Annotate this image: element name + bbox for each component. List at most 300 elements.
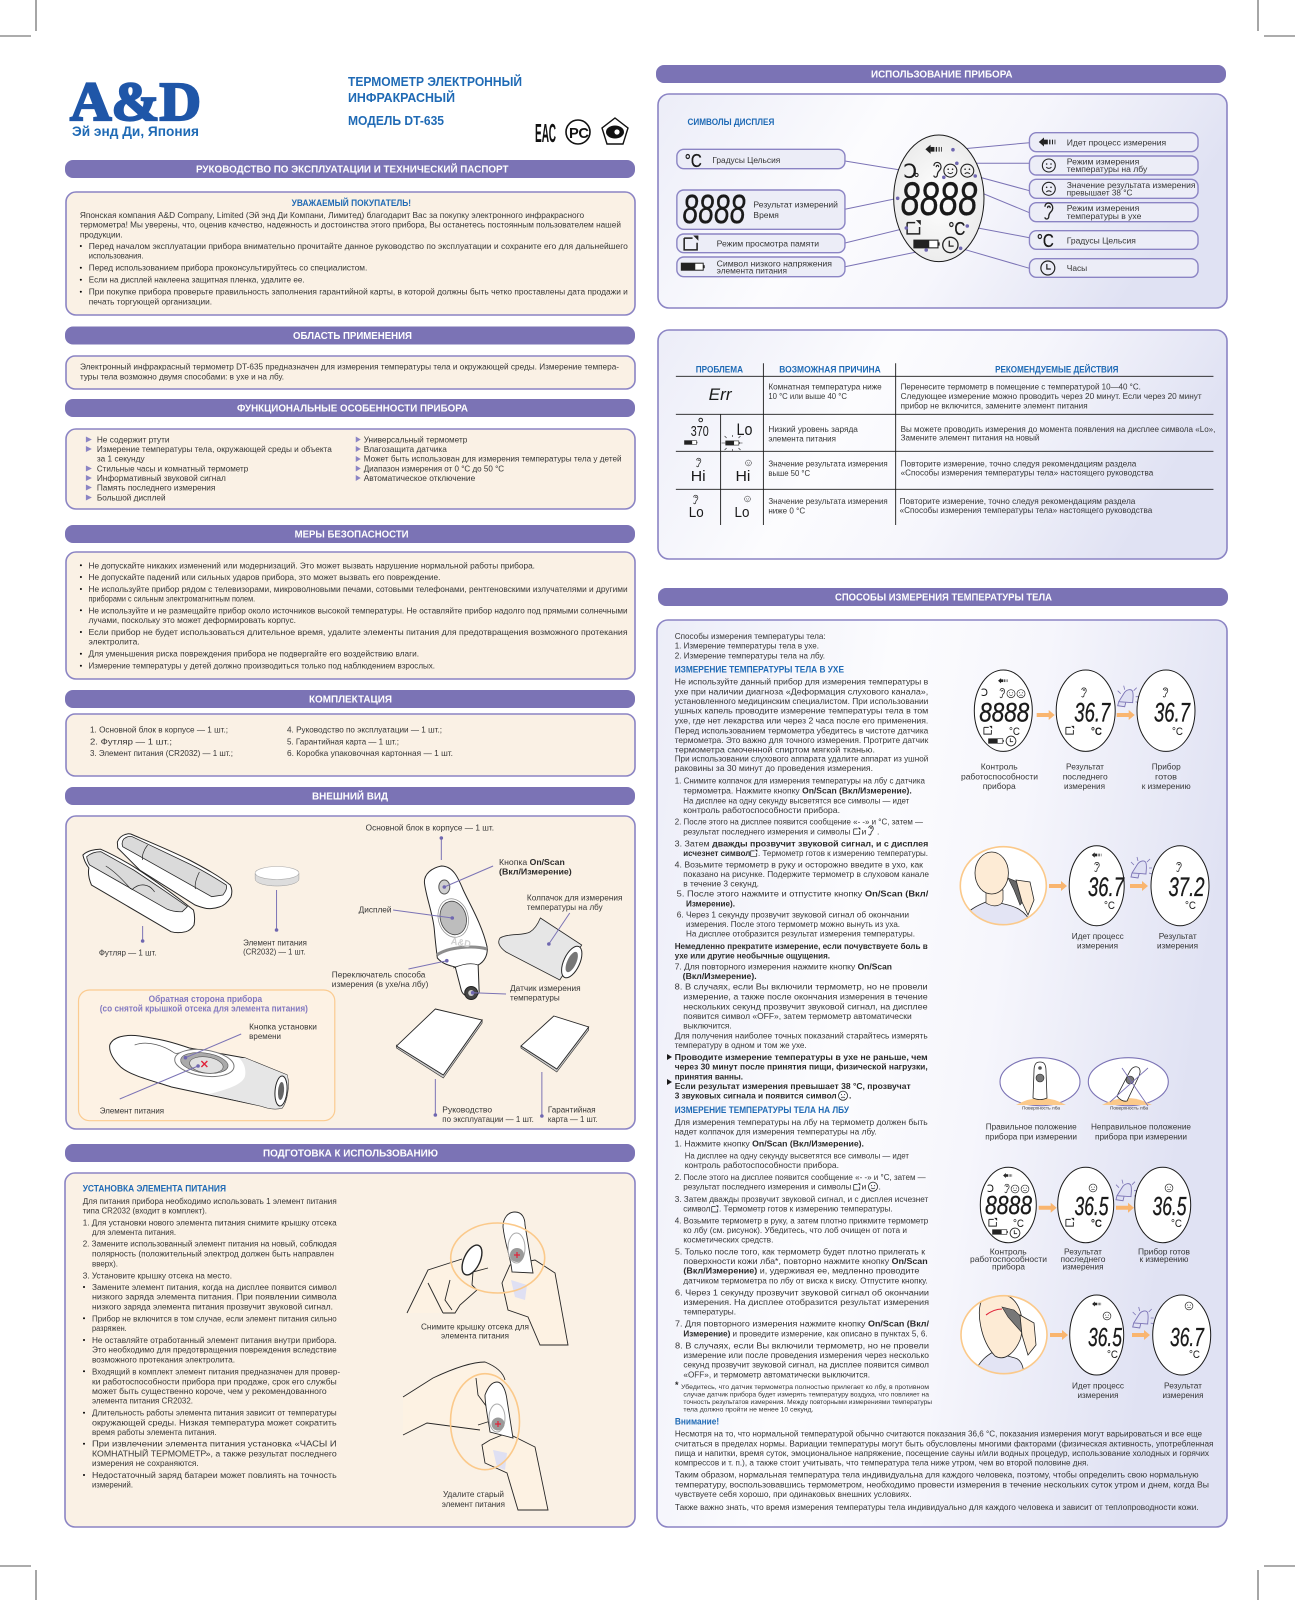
- text block: attention: чувствуете себя хорошо, при одинаковых внешних условиях.: [675, 1489, 912, 1499]
- display: ready: 36.5: [1152, 1191, 1187, 1221]
- text block: ear measurement: На дисплее на одну секунду высветятся все символы — идет: [683, 795, 909, 805]
- bar: features: ФУНКЦИОНАЛЬНЫЕ ОСОБЕННОСТИ ПРИБОРА: [237, 403, 468, 415]
- arrow: [1049, 881, 1067, 891]
- display: self-check: [974, 670, 1032, 751]
- legend: high temperature: [1029, 179, 1198, 198]
- row: low battery: 370: [691, 423, 709, 440]
- display: ready: °C: [1171, 1218, 1182, 1230]
- leader: warranty: [540, 1072, 544, 1118]
- text block: battery installation: для элемента питания.: [92, 1227, 176, 1237]
- bar: usage: ИСПОЛЬЗОВАНИЕ ПРИБОРА: [871, 68, 1013, 80]
- display: self-check: 8888: [985, 1190, 1032, 1220]
- legend: high temperature: превышает 38 °C: [1067, 188, 1132, 198]
- panel: preparation: Снимите крышку отсека для: [421, 1322, 529, 1332]
- panel: contents: 1. Основной блок в корпусе — 1 шт.;: [90, 725, 228, 735]
- text block: ear measurement: 2. Измерение температуры тела на лбу.: [675, 650, 825, 660]
- captions: к измерению: [1142, 781, 1191, 791]
- display: self-check: °C: [1009, 726, 1020, 738]
- display: result: [1153, 1295, 1211, 1375]
- text block: forehead measurement: На дисплее на одну секунду высветятся все символы — идет: [685, 1150, 909, 1160]
- text block: forehead measurement: надет колпачок для измерения температуры на лбу.: [675, 1127, 877, 1137]
- text block: ear measurement: 1. Снимите колпачок для измерения температуры на лбу с датчика: [675, 776, 925, 786]
- captions: прибора при измерении: [985, 1131, 1077, 1141]
- panel: appearance: Датчик измерения: [510, 983, 581, 993]
- panel: features: [66, 429, 635, 509]
- panel: dear customer: [66, 192, 635, 315]
- bar: scope: [65, 326, 635, 344]
- text block: forehead measurement: 5. Только после того, как термометр будет плотно прилегать к: [675, 1246, 925, 1256]
- diagram: forehead measurement: [961, 1295, 1211, 1400]
- panel: methods: [657, 620, 1227, 1527]
- arrow: [1117, 710, 1135, 720]
- panel: back side inset: Элемент питания: [100, 1106, 164, 1116]
- leader: button: [443, 866, 493, 889]
- panel: appearance: температуры: [510, 993, 560, 1003]
- panel: features: Автоматическое отключение: [364, 473, 475, 483]
- text block: battery installation: Не оставляйте отработанный элемент питания внутри прибора.: [92, 1335, 337, 1345]
- text block: ear measurement: Перед использованием термометра убедитесь в чистоте датчика: [675, 725, 929, 735]
- text block: ear measurement: 5. После этого нажмите и отпустите кнопку On/Scan (Вкл/: [677, 888, 929, 898]
- bar: scope: ОБЛАСТЬ ПРИМЕНЕНИЯ: [293, 330, 412, 342]
- bar: preparation: [65, 1144, 635, 1162]
- text block: battery installation: При извлечении элемента питания установка «ЧАСЫ И: [92, 1439, 337, 1449]
- captions: прибора при измерении: [1095, 1131, 1187, 1141]
- text block: battery installation: может быть существенно короче, чем у рекомендованного: [92, 1386, 327, 1396]
- bar: contents: [65, 690, 635, 708]
- panel: appearance: [66, 816, 635, 1129]
- captions: [961, 762, 1191, 791]
- captions: измерения: [1078, 1390, 1119, 1400]
- text block: ear measurement: через 30 минут после принятия пищи, физической нагрузки,: [675, 1062, 928, 1072]
- text block: battery installation: измерения не сохраняются.: [92, 1458, 199, 1468]
- panel: display symbols: [658, 94, 1227, 308]
- bar: features: [65, 399, 635, 417]
- row: Lo: ниже 0 °C: [768, 505, 805, 515]
- text block: ear measurement: и: [862, 826, 866, 836]
- row: low battery: Низкий уровень заряда: [768, 424, 858, 434]
- captions: Неправильное положение: [1091, 1122, 1191, 1132]
- display: ready: 36.7: [1154, 698, 1191, 728]
- text block: ear measurement: 6. Через 1 секунду прозвучит звуковой сигнал об окончании: [677, 910, 909, 920]
- text block: ear measurement: ухе или другие необычные ощущения.: [675, 951, 830, 961]
- text block: battery installation: ки работоспособности прибора при продаже, срок его службы: [92, 1376, 337, 1386]
- display: ready: [1137, 670, 1195, 751]
- bar: manual heading: [65, 160, 635, 178]
- text block: forehead measurement: косметических средств.: [683, 1235, 773, 1245]
- icon: manual: [397, 1009, 482, 1078]
- row: low battery: [684, 418, 1215, 451]
- bar: manual heading: РУКОВОДСТВО ПО ЭКСПЛУАТАЦИИ И ТЕХНИЧЕСКИЙ ПАСПОРТ: [196, 163, 509, 176]
- text block: battery installation: разряжен.: [92, 1323, 127, 1333]
- text block: battery installation: 3. Установите крышку отсека на место.: [83, 1270, 232, 1280]
- legend: clock: Часы: [1067, 263, 1087, 273]
- bar: methods: [658, 588, 1228, 606]
- arrow: [1116, 1203, 1134, 1213]
- text block: ear measurement: термометра. Это важно для точного измерения. Протрите датчик: [675, 735, 929, 745]
- logo: A&D: Эй энд Ди, Япония: [72, 123, 199, 139]
- text block: forehead measurement: измерения. На дисплее отобразится результат измерения: [683, 1297, 929, 1307]
- text block: battery installation: 1. Для установки нового элемента питания снимите крышку отсека: [83, 1217, 337, 1227]
- footnote: случае датчик прибора будет измерять температуру воздуха, что повлияет на: [683, 1390, 929, 1398]
- captions: работоспособности: [970, 1254, 1047, 1264]
- text block: ear measurement: ухе при наличии диагноза «Деформация слухового канала»,: [675, 686, 928, 696]
- panel: preparation: Удалите старый: [443, 1489, 504, 1499]
- panel: contents: [66, 714, 635, 776]
- panel: safety: Не используйте прибор рядом с телевизорами, микроволновыми печами, сотовыми телефонами, рентгеновскими излучателями и другими: [88, 584, 628, 594]
- panel: scope: Электронный инфракрасный термометр DT-635 предназначен для измерения температуры тела и окружающей среды. Измерение темпера-: [80, 361, 619, 371]
- text block: battery installation: измерений.: [92, 1480, 133, 1490]
- title: ТЕРМОМЕТР ЭЛЕКТРОННЫЙ: [348, 74, 522, 89]
- row: Hi: Повторите измерение, точно следуя рекомендациям раздела: [901, 458, 1137, 468]
- bar: preparation: ПОДГОТОВКА К ИСПОЛЬЗОВАНИЮ: [263, 1148, 438, 1160]
- icon: device back: [110, 1035, 288, 1109]
- text block: forehead measurement: «OFF», и термометр автоматически выключится.: [683, 1369, 870, 1379]
- leader: battery: [275, 890, 278, 932]
- captions: последнего: [1060, 1254, 1106, 1264]
- panel: appearance: Футляр — 1 шт.: [99, 947, 157, 957]
- panel: troubleshooting: РЕКОМЕНДУЕМЫЕ ДЕЙСТВИЯ: [995, 363, 1118, 374]
- display: self-check: Ↄ: [987, 1184, 994, 1195]
- captions: измерения: [1062, 1262, 1104, 1272]
- text block: battery installation: Для питания прибора необходимо использовать 1 элемент питания: [83, 1196, 337, 1206]
- panel: safety: приборами с сильным электромагнитным полем.: [88, 594, 255, 604]
- certification marks: ЕАС: [535, 118, 556, 148]
- panel: features: Влагозащита датчика: [364, 444, 447, 454]
- correct position: [1000, 1058, 1080, 1110]
- display: result: °C: [1189, 1349, 1200, 1361]
- panel: features: Память последнего измерения: [97, 483, 216, 493]
- leader: time button: [184, 1034, 241, 1059]
- text block: ear measurement: Не используйте данный прибор для измерения температуры в: [675, 676, 929, 686]
- text block: ear measurement: ушных капель проводите измерение температуры тела в том: [675, 706, 928, 716]
- display: measuring: [1069, 846, 1125, 926]
- text block: ear measurement: раковины за 30 минут до проведения измерения.: [675, 763, 873, 773]
- bar: safety: МЕРЫ БЕЗОПАСНОСТИ: [295, 529, 409, 541]
- text block: battery installation: УСТАНОВКА ЭЛЕМЕНТА ПИТАНИЯ: [83, 1183, 226, 1193]
- panel: safety: Не допускайте никаких изменений или модернизаций. Это может вызвать нарушение нормальной работы прибора.: [88, 560, 535, 570]
- text block: ear measurement: исчезнет символ: [683, 848, 750, 858]
- row: Err: 10 °C или выше 40 °C: [768, 391, 847, 401]
- footnote: Убедитесь, что датчик термометра полностью прилегает ко лбу, в противном: [681, 1383, 929, 1391]
- captions: Идет процесс: [1072, 931, 1124, 941]
- captions: измерения: [1077, 941, 1118, 951]
- panel: contents: 6. Коробка упаковочная картонная — 1 шт.: [287, 748, 453, 758]
- row: Err: прибор не включится, замените элемент питания: [901, 400, 1088, 410]
- text block: ear measurement: измерение, а также после окончания измерения в течение: [683, 992, 928, 1002]
- text block: forehead measurement: поверхности кожи лба*, повторно нажмите кнопку On/Scan: [683, 1256, 928, 1266]
- text block: attention: Таким образом, нормальная температура тела индивидуальна для каждого человека, поэтому, чтобы определить свою нормальную: [675, 1470, 1199, 1480]
- text block: forehead measurement: .: [878, 1182, 881, 1192]
- text block: forehead measurement: секунд прозвучит звуковой сигнал, на дисплее появится символ: [683, 1360, 929, 1370]
- icon: warranty card: [521, 1016, 589, 1072]
- legend: forehead mode: [1029, 156, 1198, 175]
- text block: ear measurement: .: [877, 826, 879, 836]
- legend: result: [677, 186, 845, 232]
- display: measuring: 36.7: [1088, 872, 1125, 902]
- captions: Прибор готов: [1138, 1246, 1190, 1256]
- text block: forehead measurement: ИЗМЕРЕНИЕ ТЕМПЕРАТУРЫ ТЕЛА НА ЛБУ: [675, 1105, 849, 1115]
- text block: ear measurement: 3 звуковых сигнала и появится символ: [675, 1091, 837, 1101]
- display: result: [1151, 846, 1209, 926]
- text block: attention: компрессов и т. п.), а также стоит учитывать, что температура тела ниже утром, чем во второй половине дня.: [675, 1458, 1089, 1468]
- legend: low battery: элемента питания: [717, 266, 787, 276]
- diagram: correct and incorrect positioning: [985, 1058, 1191, 1141]
- illustration: removing cover: [407, 1212, 568, 1345]
- row: low battery: Замените элемент питания на новый: [901, 433, 1040, 443]
- text block: forehead measurement: 1. Нажмите кнопку On/Scan (Вкл/Измерение).: [675, 1138, 864, 1148]
- captions: Результат: [1159, 931, 1197, 941]
- incorrect position: Поверхность лба: [1110, 1106, 1148, 1110]
- row: Lo: Lo: [735, 504, 749, 521]
- text block: ear measurement: измерения. После этого термометр можно вынуть из уха.: [686, 919, 900, 929]
- legend: low battery: Символ низкого напряжения: [717, 258, 832, 268]
- text block: ear measurement: показано на рисунке. Подержите термометр в слуховом канале: [683, 869, 929, 879]
- row: Hi: Hi: [736, 468, 750, 485]
- captions: Контроль: [990, 1246, 1027, 1256]
- text block: ear measurement: Для получения наиболее точных показаний старайтесь измерять: [675, 1030, 928, 1040]
- text block: forehead measurement: символ: [683, 1204, 710, 1214]
- panel: safety: лучами, поскольку это может деформировать корпус.: [88, 615, 296, 625]
- panel: dear customer: Перед использованием прибора проконсультируйтесь со специалистом.: [89, 263, 367, 273]
- footnote: тела должно пройти не менее 10 секунд.: [683, 1405, 814, 1413]
- text block: ear measurement: (Вкл/Измерение).: [683, 971, 757, 981]
- legend: result: 8888: [683, 186, 746, 232]
- icon: battery: [255, 866, 299, 886]
- panel: contents: 2. Футляр — 1 шт.;: [90, 736, 172, 746]
- panel: appearance: Элемент питания: [243, 937, 307, 947]
- row: low battery: Вы можете проводить измерения до момента появления на дисплее символа «Lo»,: [901, 424, 1215, 434]
- captions: к измерению: [1140, 1254, 1189, 1264]
- text block: ear measurement: появится символ «OFF», затем термометр автоматически: [683, 1011, 912, 1021]
- display: last result: °C: [1091, 1218, 1102, 1230]
- row: Hi: Значение результата измерения: [768, 458, 888, 468]
- text block: forehead measurement: датчиком термометра по лбу от виска к виску. Отпустите кнопку.: [683, 1276, 928, 1286]
- logo: A&D: A&D: [70, 71, 201, 132]
- illustration: head with thermometer on forehead: [961, 1295, 1047, 1378]
- panel: back side inset: времени: [249, 1031, 281, 1041]
- captions: прибора: [983, 781, 1016, 791]
- display: measuring: [1070, 1295, 1124, 1375]
- row: Err: Следующее измерение можно проводить через 20 минут. Если через 20 минут: [901, 391, 1202, 401]
- illustration: head with thermometer in ear: [960, 847, 1046, 930]
- text block: ear measurement: 3. Затем дважды прозвучит звуковой сигнал, и с дисплея: [675, 838, 928, 848]
- text block: ear measurement: . Термометр готов к измерению температуры.: [758, 848, 928, 858]
- panel: contents: 5. Гарантийная карта — 1 шт.;: [287, 736, 399, 746]
- panel: appearance: (Вкл/Измерение): [499, 867, 572, 877]
- text block: ear measurement: принятия ванны.: [675, 1071, 743, 1081]
- text block: ear measurement: в течение 3 секунд.: [683, 879, 759, 889]
- text block: forehead measurement: 6. Через 1 секунду прозвучит звуковой сигнал об окончании: [675, 1287, 929, 1297]
- panel: features: за 1 секунду: [97, 454, 145, 464]
- text block: forehead measurement: . Термометр готов к измерению температуры.: [719, 1204, 893, 1214]
- text block: forehead measurement: 2. После этого на дисплее появится сообщение «- -» и °C, затем —: [675, 1172, 926, 1182]
- leader: display: [393, 910, 454, 920]
- display: last result: 36.7: [1074, 698, 1111, 728]
- certification marks: [535, 118, 628, 148]
- row: Hi: «Способы измерения температуры тела» настоящего руководства: [901, 468, 1153, 478]
- text block: battery installation: Замените элемент питания, когда на дисплее появится символ: [92, 1282, 337, 1292]
- panel: features: Универсальный термометр: [364, 434, 467, 444]
- panel: features: Большой дисплей: [97, 492, 166, 502]
- text block: ear measurement: ухе, где нет лекарства или через 2 часа после его применения.: [675, 716, 928, 726]
- panel: safety: Для уменьшения риска повреждения прибора не подвергайте его воздействию влаги.: [88, 649, 419, 659]
- captions: работоспособности: [961, 771, 1038, 781]
- text block: ear measurement: 1. Измерение температуры тела в ухе.: [675, 641, 819, 651]
- text block: battery installation: Недостаточный заряд батареи может повлиять на точность: [92, 1470, 337, 1480]
- legend: degrees: [677, 149, 845, 171]
- panel: scope: [66, 356, 635, 389]
- text block: battery installation: [83, 1183, 340, 1490]
- display oval: [894, 135, 984, 262]
- panel: features: Информативный звуковой сигнал: [97, 473, 226, 483]
- leader: back battery: [120, 1064, 200, 1099]
- legend: degrees right: Градусы Цельсия: [1067, 235, 1136, 245]
- captions: [1072, 1380, 1204, 1400]
- display: ready: °C: [1172, 726, 1183, 738]
- legend: degrees: °C: [685, 151, 702, 171]
- connector lines: [845, 143, 1029, 268]
- row: Err: Перенесите термометр в помещение с температурой 10—40 °C.: [901, 382, 1141, 392]
- panel: safety: Не допускайте падений или сильных ударов прибора, это может вызвать его повреждение.: [88, 572, 440, 582]
- text block: ear measurement: [667, 631, 929, 1101]
- panel: safety: Не используйте и не размещайте прибор около источников высокой температуры. Не оставляйте прибор надолго под прямыми солнечными: [88, 605, 628, 615]
- panel: appearance: Колпачок для измерения: [527, 892, 623, 902]
- captions: Идет процесс: [1072, 1380, 1125, 1390]
- legend: low battery: [677, 257, 845, 277]
- captions: Правильное положение: [986, 1122, 1077, 1132]
- panel: appearance: Дисплей: [359, 904, 392, 914]
- arrow: [1039, 1203, 1057, 1213]
- text block: forehead measurement: измерение или после проведения измерения через несколько: [683, 1350, 929, 1360]
- panel: appearance: по эксплуатации — 1 шт.: [442, 1114, 534, 1124]
- text block: ear measurement: Немедленно прекратите измерение, если почувствуете боль в: [675, 941, 928, 951]
- panel: appearance: Кнопка On/Scan: [499, 857, 565, 867]
- leader: sensor: [471, 991, 506, 994]
- legend: degrees: Градусы Цельсия: [712, 155, 781, 165]
- captions: Результат: [1164, 1380, 1202, 1390]
- display: result: 36.7: [1170, 1322, 1205, 1352]
- text block: battery installation: 2. Замените использованный элемент питания на новый, соблюдая: [83, 1239, 337, 1249]
- certification marks: РС: [569, 125, 589, 142]
- text block: ear measurement: 8. В случаях, если Вы включили термометр, но не провели: [675, 982, 928, 992]
- panel: dear customer: продукции.: [80, 229, 123, 239]
- text block: forehead measurement: температуры.: [683, 1307, 736, 1317]
- panel: dear customer: При покупке прибора проверьте правильность заполнения гарантийной карты, в которой должны быть четко проставлены дата продажи и: [89, 287, 628, 297]
- display: self-check: °C: [1013, 1218, 1024, 1230]
- captions: измерения: [1157, 941, 1198, 951]
- legend: ear mode: Режим измерения: [1067, 203, 1140, 213]
- row: Err: Err: [709, 385, 733, 404]
- bar: appearance: ВНЕШНИЙ ВИД: [312, 790, 388, 803]
- row: Hi: [691, 458, 1153, 485]
- panel: dear customer: термометра! Мы уверены, что, оценив качество, надежность и достоинства этого прибора, Вы останетесь постоянным пользователем нашей: [80, 220, 621, 230]
- text block: ear measurement: При использовании слухового аппарата удалите аппарат из ушной: [675, 753, 928, 763]
- panel: preparation: элемента питания: [441, 1331, 509, 1341]
- icon: forehead cap: [499, 918, 586, 981]
- text block: ear measurement: 2. После этого на дисплее появится сообщение «- -» и °C, затем —: [675, 817, 923, 827]
- text block: ear measurement: ИЗМЕРЕНИЕ ТЕМПЕРАТУРЫ ТЕЛА В УХЕ: [675, 664, 844, 674]
- leader: case: [141, 926, 144, 943]
- panel: safety: Если прибор не будет использоваться длительное время, удалите элементы питания для предотвращения возможного протекания: [88, 627, 628, 637]
- text block: ear measurement: Проводите измерение температуры в ухе не раньше, чем: [675, 1052, 928, 1062]
- text block: battery installation: возможного протекания электролита.: [92, 1354, 235, 1364]
- footnote: [675, 1380, 932, 1413]
- display oval: 8888: [901, 173, 977, 225]
- text block: ear measurement: 7. Для повторного измерения нажмите кнопку On/Scan: [675, 962, 892, 972]
- arrow: [1132, 1330, 1150, 1340]
- panel: appearance: карта — 1 шт.: [548, 1114, 598, 1124]
- display: last result: °C: [1091, 726, 1102, 738]
- text block: attention: Внимание!: [675, 1417, 719, 1427]
- text block: ear measurement: контроль работоспособности прибора.: [683, 805, 840, 815]
- title: ИНФРАКРАСНЫЙ: [348, 90, 455, 105]
- footnote: *: [675, 1380, 679, 1390]
- legend: degrees right: [1029, 231, 1198, 251]
- icon: thermometer: A&D: [450, 936, 472, 951]
- legend: memory: [677, 234, 845, 253]
- diagram: ear sequence, check: [961, 670, 1195, 791]
- captions: Контроль: [981, 762, 1018, 772]
- panel: safety: Измерение температуры у детей должно производиться только под наблюдением взрослых.: [88, 661, 435, 671]
- panel: preparation: [65, 1173, 635, 1527]
- text block: battery installation: Входящий в комплект элемент питания предназначен для провер-: [92, 1366, 340, 1376]
- legend: measuring: Идет процесс измерения: [1067, 137, 1167, 147]
- row: Lo: «Способы измерения температуры тела» настоящего руководства: [900, 505, 1152, 515]
- captions: Результат: [1064, 1246, 1102, 1256]
- bar: usage: [656, 65, 1226, 83]
- text block: forehead measurement: Измерение) и проведите измерение, как описано в пунктах 5, 6.: [683, 1328, 928, 1338]
- captions: Прибор: [1152, 762, 1181, 772]
- text block: battery installation: низкого заряда элемента питания. При появлении символа: [92, 1292, 337, 1302]
- captions: последнего: [1063, 771, 1108, 781]
- panel: contents: 3. Элемент питания (CR2032) — 1 шт.;: [90, 748, 233, 758]
- table lines: [676, 363, 1213, 525]
- text block: ear measurement: Измерение).: [686, 898, 735, 908]
- row: low battery: элемента питания: [768, 433, 836, 443]
- leader: cap: [547, 913, 570, 946]
- panel: features: Не содержит ртути: [97, 434, 170, 444]
- text block: attention: Также важно знать, что время измерения температуры тела индивидуально для каждого человека и зависит от теплопроводности кожи.: [675, 1502, 1199, 1512]
- panel: scope: туры тела возможно двумя способами: в ухе и на лбу.: [80, 372, 284, 382]
- legend: memory: Режим просмотра памяти: [717, 239, 819, 249]
- arrow: [1130, 881, 1148, 891]
- arrow: [1037, 710, 1055, 720]
- captions: прибора: [992, 1262, 1025, 1272]
- title: [348, 74, 522, 128]
- icon: bell: [1116, 1180, 1137, 1201]
- text block: battery installation: КОМНАТНЫЙ ТЕРМОМЕТР», а также результат последнего: [92, 1447, 337, 1458]
- legend: measuring: [1029, 133, 1198, 152]
- display: last result: 36.5: [1074, 1191, 1109, 1221]
- icon: case: [83, 834, 232, 933]
- text block: battery installation: окружающей среды. Низкая температура может сократить: [92, 1417, 337, 1427]
- legend: ear mode: температуры в ухе: [1067, 211, 1142, 221]
- bar: contents: КОМПЛЕКТАЦИЯ: [309, 694, 392, 706]
- text block: forehead measurement: [675, 1105, 930, 1379]
- panel: appearance: (CR2032) — 1 шт.: [243, 947, 305, 957]
- row: Err: [709, 382, 1202, 410]
- text block: ear measurement: результат последнего измерения и символы: [683, 826, 850, 836]
- captions: измерения: [1064, 781, 1105, 791]
- leader: switch: [408, 959, 449, 969]
- text block: forehead measurement: Для измерения температуры на лбу на термометр должен быть: [675, 1117, 928, 1127]
- legend: degrees right: °C: [1037, 231, 1054, 251]
- text block: forehead measurement: 8. В случаях, если Вы включили термометр, но не провели: [675, 1340, 929, 1350]
- captions: Результат: [1066, 762, 1104, 772]
- text block: attention: считаться в пределах нормы. Вариации температуры могут быть обусловлены многими факторами (физическая активность, употребленная: [675, 1438, 1214, 1448]
- row: Hi: выше 50 °C: [768, 468, 810, 478]
- text block: attention: [675, 1417, 1214, 1512]
